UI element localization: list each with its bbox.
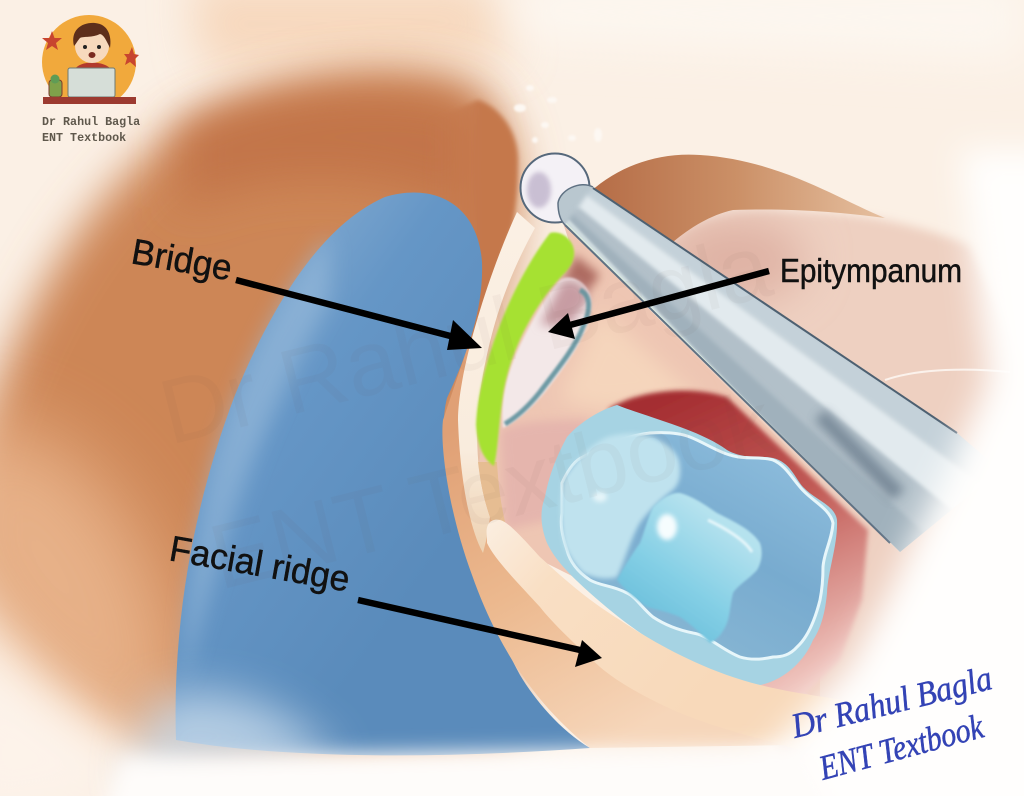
dark streak on shaft [815,410,905,500]
bone dust particles [514,85,602,143]
logo caption: Dr Rahul Bagla [42,115,140,129]
logo stars [42,31,62,50]
blue oval window [541,405,837,685]
shaft body [558,186,973,552]
orange-brown canal wall [0,70,520,796]
tan membrane fold [590,155,885,242]
green highlighted bridge area [476,232,574,466]
lower cavity lining [478,223,820,700]
footplate lobe [561,433,680,578]
signature: ENT Textbook [814,706,989,788]
watermark: Dr Rahul Bagla [150,214,781,464]
logo bottle [49,80,62,97]
label: Epitympanum [548,252,962,339]
facial ridge [487,520,880,750]
label: Facial ridge [167,528,602,667]
label: Bridge [129,231,482,350]
outer rim [541,405,837,685]
blue soft-tissue flap [130,193,590,790]
red promontory recess [590,390,868,710]
right and bottom fade to white [100,150,1024,796]
bridge bone strip [458,212,535,553]
teal rim of epitympanum [505,290,589,424]
watermark [150,214,783,609]
epitympanum recess [502,278,591,428]
peach outer band [442,340,800,748]
label: Facial ridge: Facial ridge [167,528,353,599]
logo boy [74,62,112,70]
drill burr and shaft [520,152,973,552]
inner well [561,433,833,659]
upper cavity lining [590,155,1024,780]
watermark: ENT Textbook [200,371,783,609]
tan strip below green [478,462,505,522]
burr ball [520,154,590,222]
label: Epitympanum: Epitympanum [780,252,962,289]
signature [787,658,996,788]
label: Bridge: Bridge [129,231,235,288]
stapes lobe [617,493,762,643]
logo [42,15,140,145]
thin nerve line [885,370,1010,380]
logo caption: ENT Textbook [42,131,126,145]
signature: Dr Rahul Bagla [787,658,996,746]
